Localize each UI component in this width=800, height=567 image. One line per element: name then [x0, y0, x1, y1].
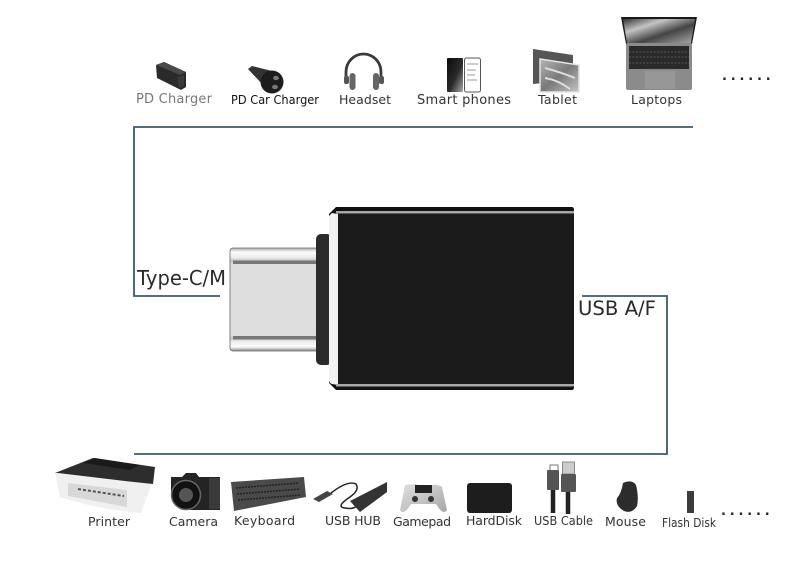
icon: PD charger: [156, 62, 186, 90]
icon: printer: [55, 458, 155, 513]
icon: laptop: [621, 17, 697, 90]
label: Camera: Camera: [169, 514, 218, 529]
ellipsis: bottom row: ......: [721, 504, 773, 519]
icon: camera: [171, 473, 220, 510]
plug bottom contact stripe: [233, 336, 318, 340]
label: USB HUB: USB HUB: [325, 513, 381, 528]
label: Mouse: Mouse: [605, 514, 646, 529]
label: USB Cable: USB Cable: [534, 513, 593, 528]
label: Gamepad: Gamepad: [393, 514, 451, 529]
icon: gamepad: [400, 484, 447, 512]
icon: mouse: [617, 481, 638, 512]
label: Type-C/M: Type-C/M: [136, 266, 226, 290]
plug top contact stripe: [233, 260, 318, 264]
body top highlight: [336, 211, 574, 214]
icon: keyboard: [231, 477, 306, 511]
icon: USB cable: [547, 462, 576, 514]
label: Laptops: Laptops: [631, 92, 682, 107]
label: Flash Disk: Flash Disk: [662, 516, 716, 530]
label: Tablet: Tablet: [537, 92, 577, 107]
icon: hard disk: [467, 483, 512, 513]
icon: flash disk: [687, 491, 694, 513]
connector line: top device group to Type-C: [134, 127, 693, 296]
label: Printer: Printer: [88, 514, 131, 529]
icon: PD car charger: [248, 66, 284, 94]
label: PD Charger: PD Charger: [136, 92, 213, 107]
body bevel highlight: [329, 213, 338, 385]
label: Smart phones: Smart phones: [417, 93, 511, 108]
body bottom highlight: [336, 384, 574, 386]
Type-C plug: [230, 248, 320, 351]
icon: headset: [344, 54, 384, 90]
label: HardDisk: HardDisk: [466, 513, 523, 528]
collar: [316, 234, 332, 365]
label: PD Car Charger: PD Car Charger: [231, 92, 320, 107]
icon: tablet: [533, 49, 579, 92]
body face: [338, 214, 574, 384]
ellipsis: top row: ......: [722, 69, 774, 84]
icon: USB hub: [313, 482, 387, 512]
adapter body frame: [329, 207, 574, 390]
adapter illustration: [230, 207, 574, 390]
icon: smart phones: [447, 58, 480, 92]
label: Headset: Headset: [339, 92, 391, 107]
label: Keyboard: Keyboard: [234, 513, 295, 528]
connector line: USB A to bottom device group: [134, 296, 667, 454]
label: USB A/F: USB A/F: [578, 297, 656, 320]
